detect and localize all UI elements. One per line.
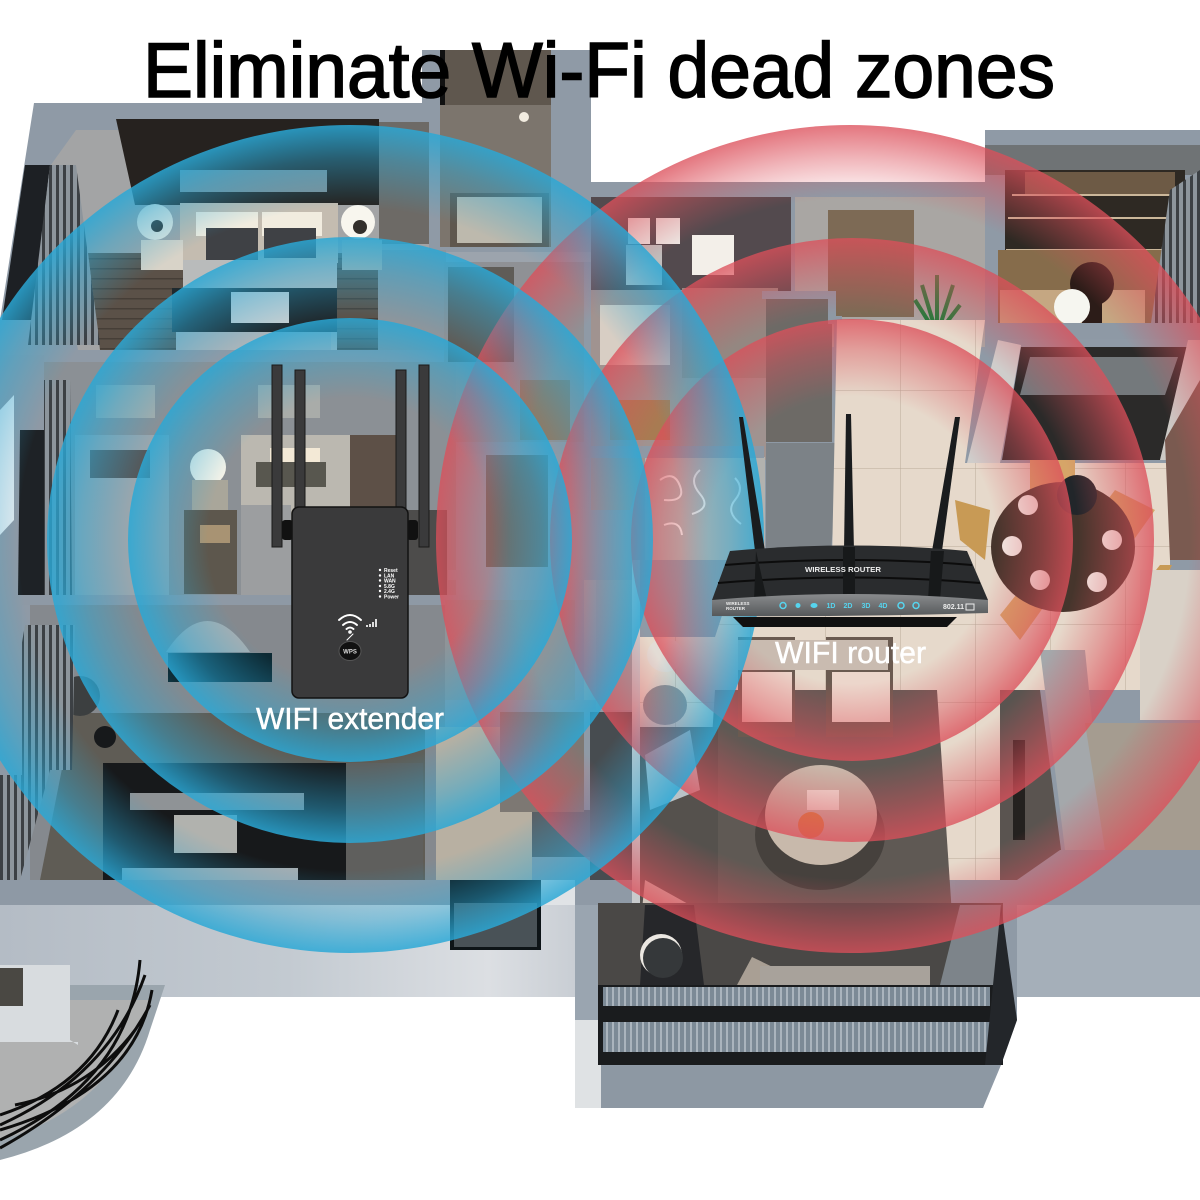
room: tiled living floor — [640, 320, 1170, 880]
room: middle left bedroom — [0, 355, 470, 640]
wps button: WPS — [343, 650, 357, 656]
panel labels — [726, 601, 964, 611]
room: upper bedroom with frames — [584, 197, 791, 560]
left balcony — [0, 960, 165, 1160]
status lights: 5.8G — [384, 584, 395, 590]
extender body — [292, 507, 408, 698]
icon: wifi — [339, 615, 361, 640]
lower balcony — [575, 903, 1017, 1108]
indicator lights: 4D — [879, 603, 887, 610]
brand logo: WIRELESS ROUTER — [805, 565, 882, 574]
room: glass partition — [967, 340, 1200, 560]
status lights: LAN — [384, 574, 395, 580]
room: top left bedroom — [2, 119, 446, 350]
front facade — [0, 880, 1200, 997]
room: bathroom top — [440, 50, 591, 262]
label: wifi router: WIFI router — [775, 635, 926, 670]
room: dining table — [955, 460, 1172, 640]
room: bathroom lower middle — [436, 455, 635, 950]
front panel — [712, 594, 988, 616]
wps button — [339, 642, 361, 660]
room: lower left bedroom — [0, 605, 445, 880]
status lights: WAN — [384, 578, 396, 584]
room: shelves study — [985, 145, 1200, 339]
status lights — [379, 568, 399, 600]
antennas — [739, 414, 960, 551]
indicator lights — [780, 602, 919, 610]
antennas — [272, 365, 429, 547]
device: wifi extender — [272, 365, 429, 698]
wifi signal: extender rings — [0, 125, 764, 953]
room: entrance hall with door and plant — [762, 197, 985, 560]
status lights: Power — [384, 594, 399, 600]
router top — [712, 546, 988, 600]
status lights: Reset — [384, 568, 398, 574]
panel labels: 802.11 — [943, 604, 964, 611]
indicator lights: 3D — [862, 603, 870, 610]
indicator lights: 1D — [827, 603, 835, 610]
device: wifi router — [712, 414, 988, 627]
underside — [733, 617, 957, 627]
room: corridor door — [444, 262, 584, 454]
icon: signal bars — [366, 619, 377, 627]
status lights: 2.4G — [384, 589, 395, 595]
indicator lights: 2D — [844, 603, 852, 610]
room: living room rug, table and chairs — [596, 560, 953, 930]
label: wifi extender: WIFI extender — [256, 701, 444, 736]
room: right stairs and side rooms — [955, 570, 1200, 905]
panel labels: WIRELESS — [726, 601, 750, 606]
panel labels: ROUTER — [726, 606, 746, 611]
title: Eliminate Wi-Fi dead zones — [143, 26, 1055, 114]
wifi signal: router rings — [436, 125, 1200, 953]
